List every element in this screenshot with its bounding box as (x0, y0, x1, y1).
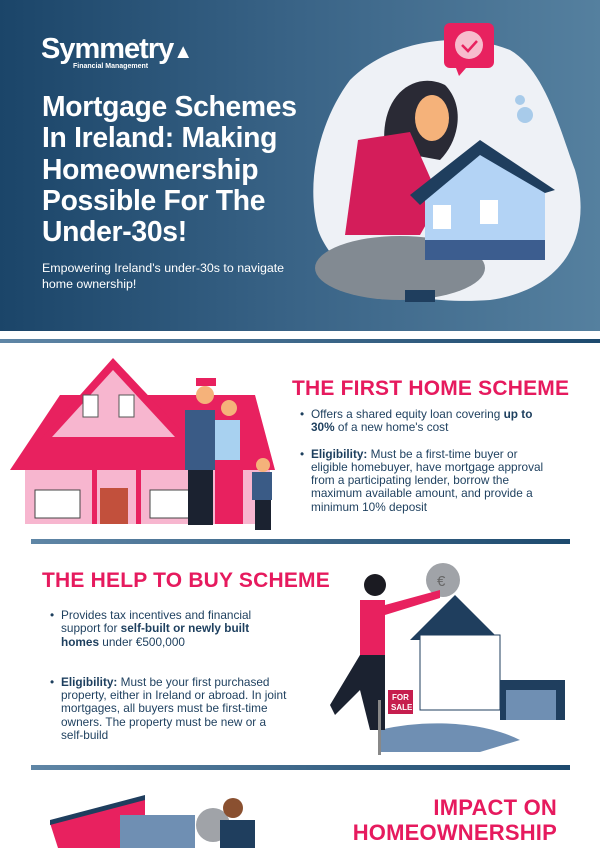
subtitle: Empowering Ireland's under-30s to navigate (42, 261, 284, 275)
heading: first home scheme: THE FIRST HOME SCHEME (292, 377, 569, 400)
heading: impact on homeownership: HOMEOWNERSHIP (353, 820, 557, 845)
bullets: help to buy (50, 608, 286, 742)
bullets: first home scheme (300, 407, 543, 514)
subtitle (42, 261, 284, 291)
illustration: pink house with family (10, 358, 275, 530)
heading: help to buy scheme: THE HELP TO BUY SCHEME (42, 569, 330, 592)
illustration: man with coin and houses (50, 795, 255, 848)
title: Mortgage Schemes (42, 90, 297, 122)
bullets: help to buy: Eligibility: Must be your first purchased property, either in Ireland or abroad. In joint mortgages, all buyers must be first-time owners. The property must be new or a self-build (61, 675, 286, 742)
hero banner (0, 0, 600, 331)
bullets: help to buy: Provides tax incentives and financial support for self-built or newly built homes under €500,000 (61, 608, 251, 649)
illustration: woman with coin and house for sale: SALE (391, 703, 413, 712)
heading: impact on homeownership (353, 795, 557, 845)
logo: Financial Management (73, 63, 148, 70)
heading: impact on homeownership: IMPACT ON (433, 795, 557, 820)
illustration: woman with coin and house for sale: € (437, 573, 446, 590)
subtitle: home ownership! (42, 277, 136, 291)
title: Possible For The (42, 184, 265, 216)
title: Homeownership (42, 153, 258, 185)
bullets: first home scheme: Offers a shared equity loan covering up to 30% of a new home's cost (311, 407, 532, 434)
title (42, 90, 297, 247)
title: Under-30s! (42, 215, 187, 247)
bullets: first home scheme: Eligibility: Must be a first-time buyer or eligible homebuyer, have mortgage approval from a participating lender, borrow the maximum available amount, and provide a minimum 10% deposit (311, 447, 543, 514)
logo: Symmetry▲ (41, 33, 192, 65)
illustration: woman with coin and house for sale (330, 563, 565, 755)
illustration: woman hugging house (313, 23, 581, 302)
illustration: woman with coin and house for sale: FOR (392, 693, 409, 702)
title: In Ireland: Making (42, 121, 277, 153)
